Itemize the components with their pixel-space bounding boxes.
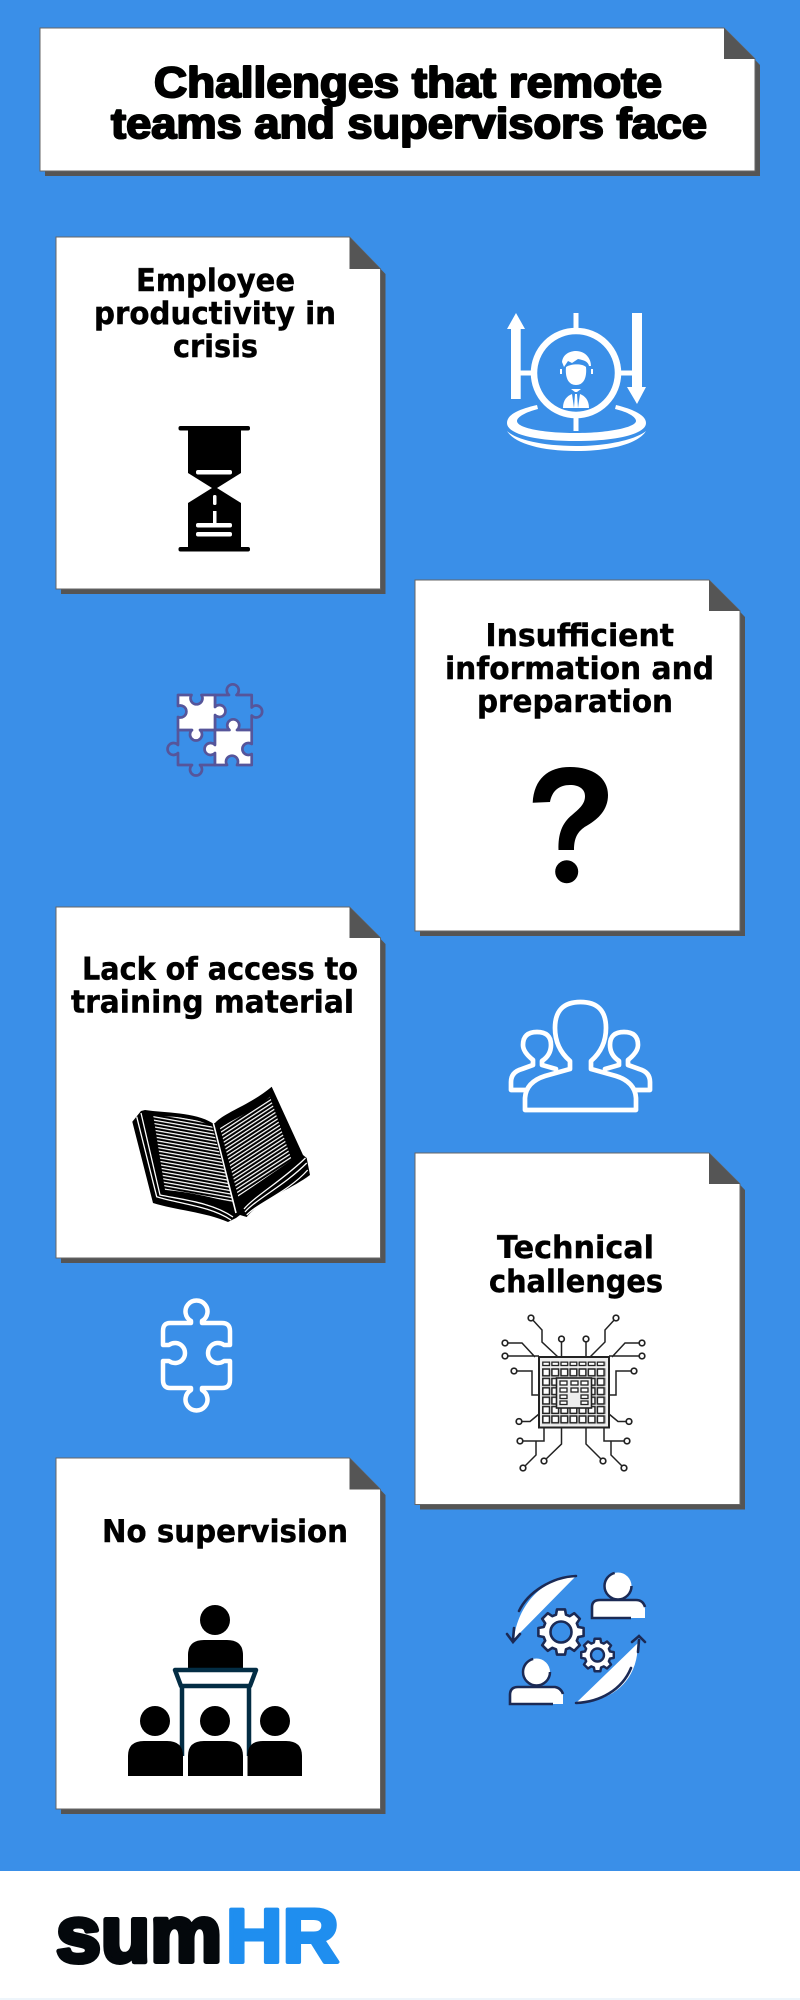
heading: employee productivity in crisis: Employee [136, 263, 295, 299]
panel: technical challenges [415, 1153, 745, 1510]
heading: technical challenges: challenges [489, 1264, 663, 1300]
panel: employee productivity [56, 237, 386, 594]
icon: open book [132, 1087, 310, 1222]
logo: sumHR: sum [56, 1890, 222, 1978]
heading: lack of access to training material: training material [71, 984, 354, 1020]
heading: insufficient information and preparation: Insufficient [486, 618, 674, 654]
heading: lack of access to training material: Lack of access to [82, 952, 358, 988]
heading: employee productivity in crisis [94, 263, 336, 365]
title text [111, 59, 707, 148]
heading: technical challenges [489, 1230, 663, 1300]
logo: sumHR [56, 1890, 339, 1979]
footer band [0, 1871, 800, 2000]
heading: lack of access to training material [71, 952, 358, 1020]
icon: circuit chip [502, 1315, 645, 1471]
title text: Challenges that remote [154, 59, 662, 107]
heading: employee productivity in crisis: crisis [173, 329, 258, 365]
icon: hourglass [178, 426, 250, 552]
icon: four puzzle pieces [168, 684, 262, 775]
heading: employee productivity in crisis: productivity in [94, 296, 336, 332]
panel: title [40, 28, 760, 176]
icon: question mark [533, 767, 608, 883]
icon: people and gears cycle [507, 1572, 645, 1704]
heading: insufficient information and preparation: preparation [477, 684, 673, 720]
title text: teams and supervisors face [111, 100, 707, 148]
panel: insufficient information [415, 580, 745, 936]
logo: sumHR: HR [226, 1894, 339, 1979]
heading: no supervision: No supervision [102, 1514, 348, 1550]
icon: target with person [507, 313, 646, 451]
panel: lack of access to training material [56, 907, 386, 1263]
heading: insufficient information and preparation [445, 618, 714, 720]
panel: no supervision [56, 1458, 386, 1814]
icon: group of people [511, 1002, 650, 1110]
icon: single puzzle piece [163, 1300, 230, 1411]
icon: presenter and audience [128, 1605, 302, 1776]
heading: insufficient information and preparation: information and [445, 651, 714, 687]
heading: technical challenges: Technical [497, 1230, 654, 1266]
